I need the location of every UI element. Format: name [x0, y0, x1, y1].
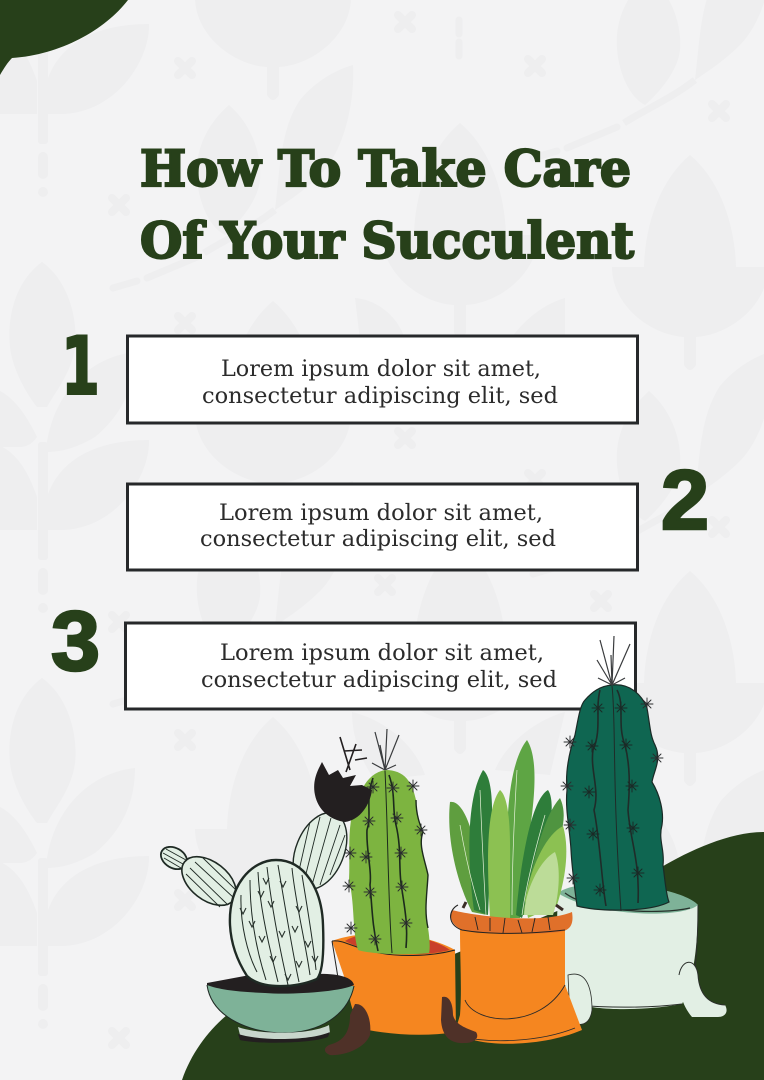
main pad ribs: [241, 865, 316, 985]
plant: prickly pear in teal bowl: [157, 737, 372, 1043]
top spines: [597, 636, 630, 685]
step 1 box: [128, 336, 638, 423]
bowl body: [207, 985, 354, 1033]
step 1 box: consectetur adipiscing elit, sed: [202, 384, 558, 409]
pot foot left: [568, 974, 592, 1024]
step 1 box: Lorem ipsum dolor sit amet,: [221, 357, 541, 382]
right brown boot: [441, 997, 477, 1043]
teal body: [567, 685, 669, 910]
step 3 number: 3: [51, 594, 100, 688]
step 2 box: Lorem ipsum dolor sit amet,: [219, 501, 543, 526]
plant: aloe in orange pot: [449, 740, 582, 1044]
title: Of Your Succulent: [140, 211, 634, 270]
step 3 box: Lorem ipsum dolor sit amet,: [220, 641, 544, 666]
title: How To Take Care: [140, 139, 631, 198]
step 1 number: 1: [61, 320, 100, 413]
top spines: [372, 729, 399, 770]
pot rim: [451, 910, 572, 934]
bowl base: [238, 1025, 330, 1043]
orange pot: [455, 930, 582, 1044]
soil: [207, 974, 354, 994]
upper pad: [283, 805, 357, 897]
step 2 box: consectetur adipiscing elit, sed: [200, 527, 556, 552]
step 3 box: [126, 623, 636, 709]
pot back: [332, 934, 456, 1035]
top-left corner blob: [0, 0, 128, 75]
plant: dark teal cactus in pale pot: [557, 636, 727, 1024]
main pad: [230, 860, 323, 986]
small pad: [157, 842, 191, 874]
bottom-right ground blob: [182, 832, 764, 1080]
title: [140, 139, 634, 270]
black flower: [314, 737, 372, 822]
step 2 box: [128, 484, 638, 570]
step 2 number: 2: [661, 453, 709, 547]
step 3 box: consectetur adipiscing elit, sed: [201, 668, 557, 693]
plant: green cactus in orange pot: [332, 729, 456, 1035]
left brown boot: [325, 1004, 370, 1055]
middle pad: [173, 847, 245, 915]
pale pot: [557, 884, 727, 1024]
aloe leaves: [449, 740, 566, 918]
pot foot right: [679, 962, 727, 1017]
green body: [349, 770, 430, 954]
